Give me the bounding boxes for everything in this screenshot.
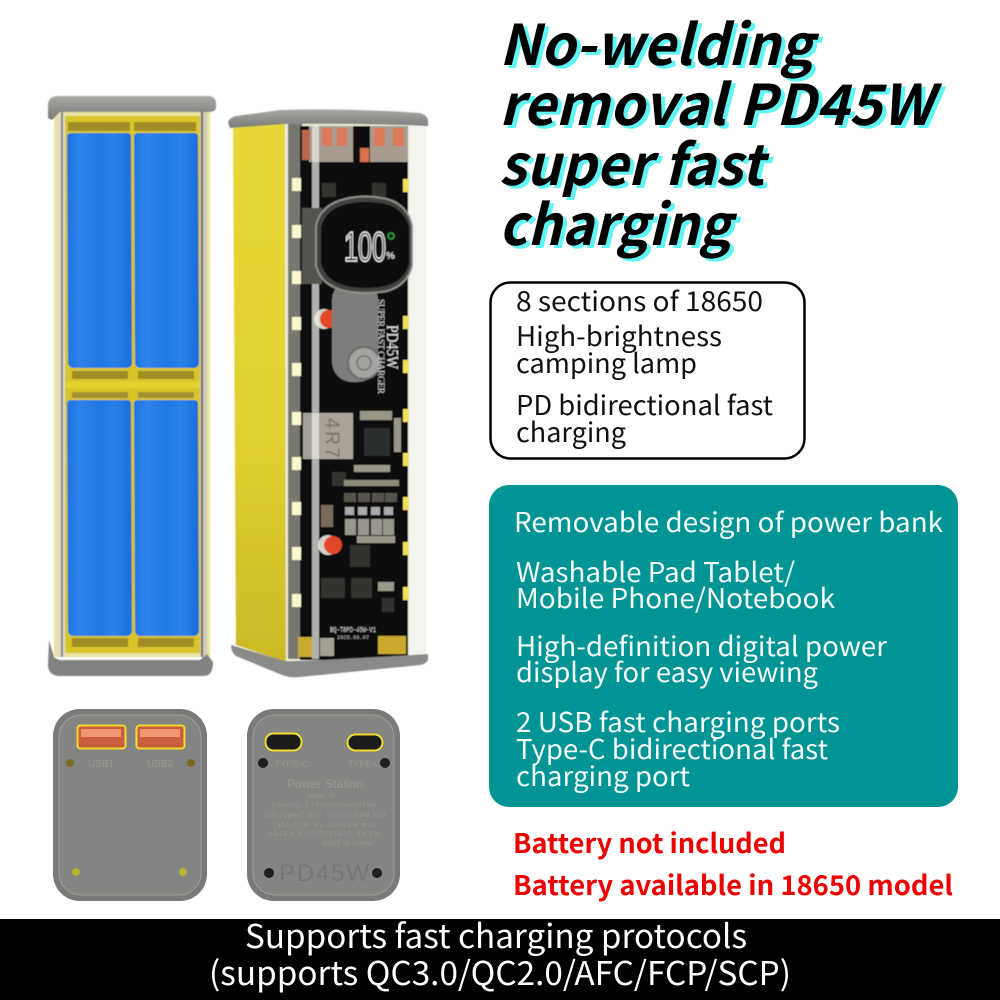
top cap — [228, 109, 428, 128]
embossed port labels — [88, 759, 174, 770]
title: charging — [503, 184, 741, 265]
protocols footer band: Supports fast charging protocols — [245, 910, 747, 958]
title: super fast — [499, 121, 770, 202]
outlined feature box: PD bidirectional fast — [516, 384, 773, 423]
outlined feature box: charging — [516, 411, 626, 450]
end cap: Type-C ports — [247, 709, 400, 901]
embossed labels: USB/Type-C OUT: 5V-20V/45W Max — [262, 813, 386, 819]
type-c port 1 — [266, 734, 302, 750]
slider with power button — [332, 280, 380, 382]
capacitor bottom — [318, 535, 342, 555]
embossed labels: Capacity: 3.7V/20000mAh/74Wh — [272, 803, 376, 809]
lamp beads left — [292, 178, 301, 607]
usb port 1 — [78, 726, 126, 748]
teal feature panel — [489, 485, 958, 807]
embossed labels: PD45W SCP/FCP/AFC 22.5W — [268, 832, 380, 838]
usb port 2 — [136, 726, 184, 748]
battery notice — [513, 822, 953, 903]
embossed port labels: USB1 — [88, 759, 115, 770]
teal feature panel: High-definition digital power — [516, 625, 888, 664]
protocols footer band: (supports QC3.0/QC2.0/AFC/FCP/SCP) — [209, 947, 791, 995]
outlined feature box — [490, 280, 804, 458]
type-c port 2 — [348, 734, 382, 750]
inductor 4R7 — [303, 413, 353, 459]
bottom cap — [231, 645, 428, 677]
battery bottom left — [67, 400, 132, 636]
battery percent: 100 — [344, 223, 386, 270]
embossed labels: MADE IN CHINA — [322, 841, 372, 847]
embossed labels: TYPE-C — [348, 759, 382, 769]
embossed labels: TYPE-C — [275, 759, 309, 769]
board model label: BQ-T8PD-45W-V1 — [330, 627, 376, 635]
inductor 4R7: 4R7 — [321, 418, 342, 458]
title: removal PD45W — [499, 61, 943, 142]
title: No-welding — [499, 1, 819, 82]
percent sign: % — [386, 251, 395, 262]
embossed port labels: USB2 — [147, 759, 174, 770]
battery top right — [134, 133, 199, 368]
display window — [302, 196, 412, 293]
embossed labels: Power Station — [287, 777, 363, 791]
title: removal PD45W — [503, 64, 947, 145]
title: super fast — [503, 124, 774, 205]
title: No-welding — [503, 4, 823, 85]
board date: 2025.03.07 — [337, 634, 369, 641]
battery top left — [67, 133, 132, 368]
protocols footer band — [0, 910, 1000, 1000]
title: charging — [499, 181, 737, 262]
teal feature panel: Removable design of power bank — [514, 501, 943, 540]
top cap — [48, 96, 216, 120]
embossed labels: Type-C IN: 5V-20V/45W Max — [273, 823, 375, 829]
embossed labels: Model: T8 — [308, 794, 335, 800]
outlined feature box: High-brightness — [516, 315, 722, 354]
yellow side panel — [233, 122, 286, 662]
outlined feature box: 8 sections of 18650 — [516, 280, 763, 319]
screws — [258, 758, 390, 878]
board label super fast charger: SUPER FAST CHARGER — [375, 299, 385, 395]
board label PD45W: PD45W — [383, 325, 402, 370]
bottom cap — [48, 640, 213, 676]
outlined feature box: camping lamp — [516, 342, 697, 381]
battery notice: Battery available in 18650 model — [513, 864, 953, 903]
lamp beads right — [403, 179, 409, 600]
chips and components — [321, 183, 401, 612]
power bank: open battery view — [48, 96, 216, 676]
battery notice: Battery not included — [513, 822, 786, 861]
screws — [66, 759, 195, 876]
teal feature panel: 2 USB fast charging ports — [516, 701, 840, 740]
embossed labels — [262, 759, 386, 847]
type-c connectors — [298, 636, 406, 657]
embossed PD45W: PD45W — [279, 860, 369, 887]
title — [499, 1, 947, 265]
usb connectors — [302, 126, 408, 162]
battery bottom right — [134, 400, 199, 636]
capacitor top — [314, 309, 338, 329]
teal feature panel: Washable Pad Tablet/ — [516, 551, 795, 590]
power bank: transparent circuit view — [228, 109, 428, 677]
indicator — [388, 233, 394, 239]
clear strip — [312, 124, 319, 659]
end cap: USB ports — [53, 709, 207, 901]
teal feature panel: charging port — [516, 755, 690, 794]
teal feature panel: Mobile Phone/Notebook — [516, 577, 835, 616]
clear housing — [285, 122, 426, 664]
teal feature panel: display for easy viewing — [516, 651, 818, 690]
circuit board — [300, 126, 408, 660]
teal feature panel: Type-C bidirectional fast — [516, 728, 828, 767]
